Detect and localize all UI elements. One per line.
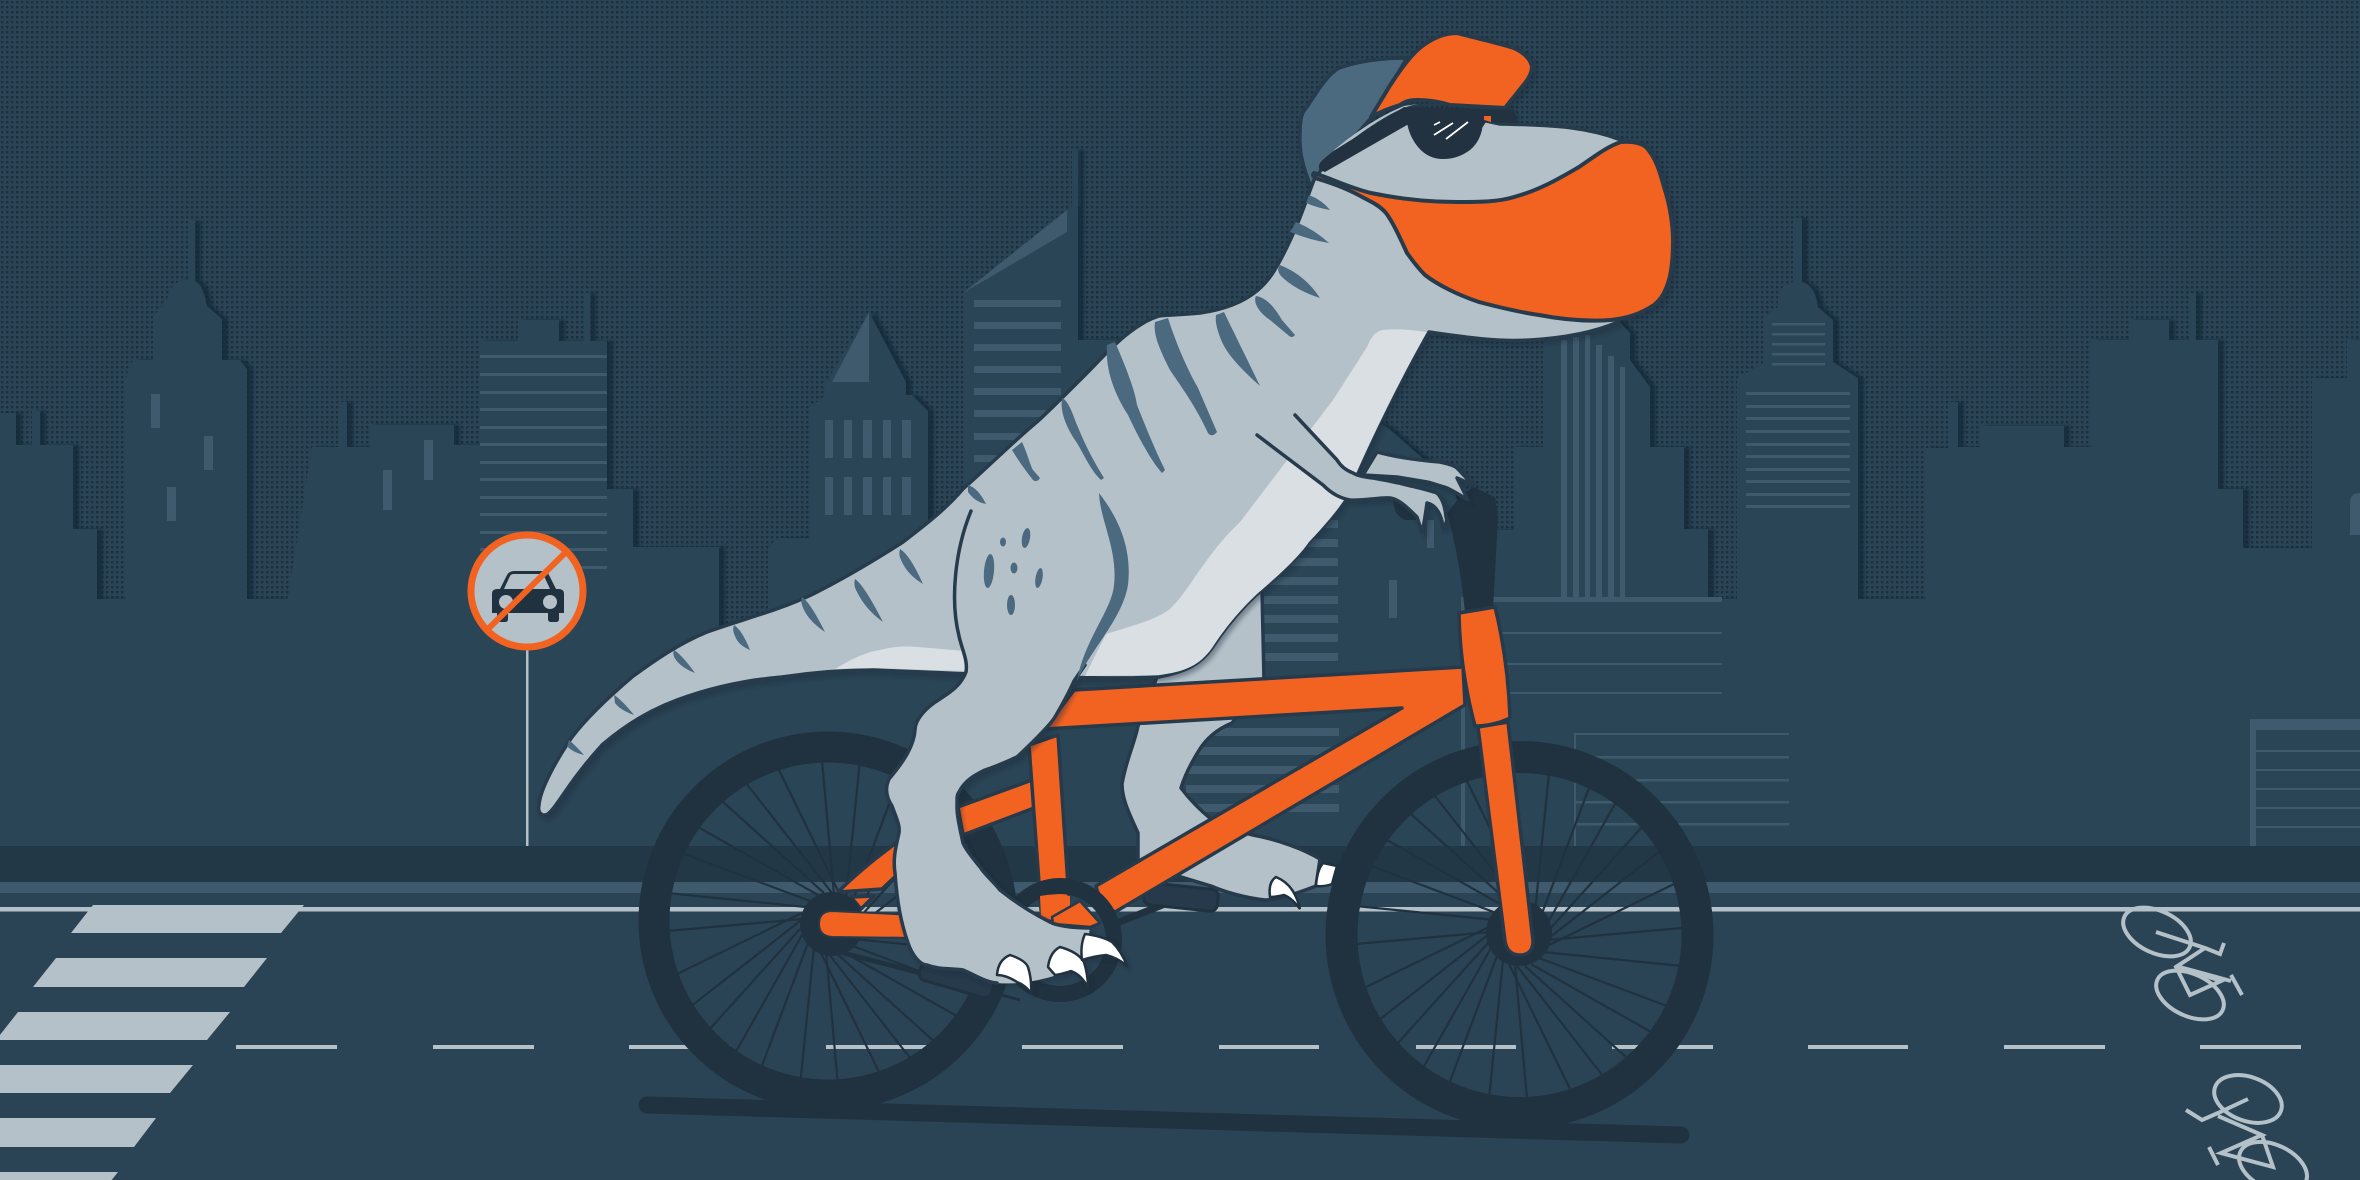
second low building outline (1574, 733, 1789, 846)
near leg outline (887, 511, 1090, 983)
snout mask (1313, 142, 1673, 321)
mid tower floors behind dino (1186, 520, 1339, 812)
ground shadow stripe (647, 1105, 1681, 1135)
lane bicycle marking bottom (2186, 1066, 2315, 1180)
pointed tower windows (825, 420, 911, 515)
bicycle frame (838, 667, 1465, 912)
chainring (1006, 886, 1114, 994)
spokes (1356, 773, 1682, 1099)
tail highlight (835, 646, 965, 671)
dome tower (1737, 218, 1858, 602)
tyre (654, 747, 1002, 1095)
seat stay small wedge (851, 896, 874, 909)
hub (1486, 900, 1552, 966)
slanted tower highlight (963, 210, 1067, 293)
block windows (383, 470, 392, 510)
pavement band (0, 882, 2360, 893)
tower windows (151, 394, 160, 428)
lens (1407, 122, 1483, 159)
city skyline (0, 150, 2360, 846)
low building outline roof (1461, 597, 1722, 846)
pillar tower (1514, 320, 1708, 602)
right edge block (2350, 493, 2360, 535)
car icon (492, 571, 564, 622)
cap crown (1300, 58, 1407, 187)
building windows (151, 210, 2360, 846)
near arm and hand (1257, 415, 1447, 532)
road surface (0, 893, 2360, 1180)
near foot claws (997, 934, 1127, 993)
chain (846, 953, 1020, 1000)
behind dino building (1078, 340, 1514, 602)
pointed roof tower (768, 312, 928, 602)
seat tube end (1040, 894, 1070, 920)
handlebar grip (1393, 498, 1418, 520)
thigh spots (983, 527, 1044, 615)
horizontal floors (480, 355, 607, 569)
seat tube (1029, 735, 1069, 910)
front wheel (1342, 757, 1698, 1113)
far leg (1122, 590, 1337, 909)
chain stay (819, 911, 915, 938)
far right building (2250, 719, 2360, 846)
pointed roof highlight (832, 312, 869, 382)
far arm and hand (1363, 452, 1473, 500)
frame highlight (1334, 104, 1418, 154)
pillars (1561, 335, 1625, 597)
dinosaur (539, 33, 1673, 993)
belly highlight (1085, 329, 1427, 676)
far pedal and crank (1117, 882, 1219, 923)
rear pedal and crank (843, 953, 995, 999)
kerb band (0, 846, 2360, 882)
road centre dashes (236, 1045, 2301, 1049)
tyre (1342, 757, 1698, 1113)
tall slanted tower (963, 150, 1078, 602)
seat stay upper (958, 780, 1034, 835)
rear hub (800, 892, 864, 956)
thigh stripe (1077, 493, 1129, 681)
no cars sign (471, 535, 583, 846)
stepped midtown block (287, 293, 719, 602)
handlebar stem (1447, 487, 1498, 612)
cap notch (1484, 116, 1491, 122)
lane bicycle marking top (2115, 898, 2242, 1029)
cap brim (1371, 33, 1532, 117)
bottom bracket (1052, 901, 1100, 927)
right block (1926, 293, 2360, 602)
art-deco tower (126, 221, 247, 602)
small bars (1389, 580, 1397, 618)
road edge line (0, 907, 2360, 912)
seat stay lower wedge (838, 840, 900, 892)
body stripes (567, 195, 1330, 755)
far foot claw (1270, 877, 1300, 909)
spokes (667, 760, 993, 1086)
dome tower floors (1746, 323, 1850, 508)
fork (1478, 722, 1533, 955)
far foot claw outer (1316, 863, 1337, 886)
sign pole (526, 650, 528, 846)
body (539, 105, 1640, 815)
rear wheel (654, 747, 1002, 1095)
left block building (0, 411, 97, 602)
prohibition slash (488, 551, 567, 629)
crosswalk (0, 905, 304, 1180)
near leg fill (887, 500, 1100, 983)
sunglasses (1319, 104, 1518, 172)
glasses arm (1319, 107, 1518, 172)
ground mass (0, 599, 2360, 846)
head tube (1459, 607, 1510, 726)
lens glints (1434, 122, 1468, 139)
sign face (471, 535, 583, 647)
slanted tower floors (974, 300, 1061, 462)
main triangle (1045, 667, 1465, 912)
